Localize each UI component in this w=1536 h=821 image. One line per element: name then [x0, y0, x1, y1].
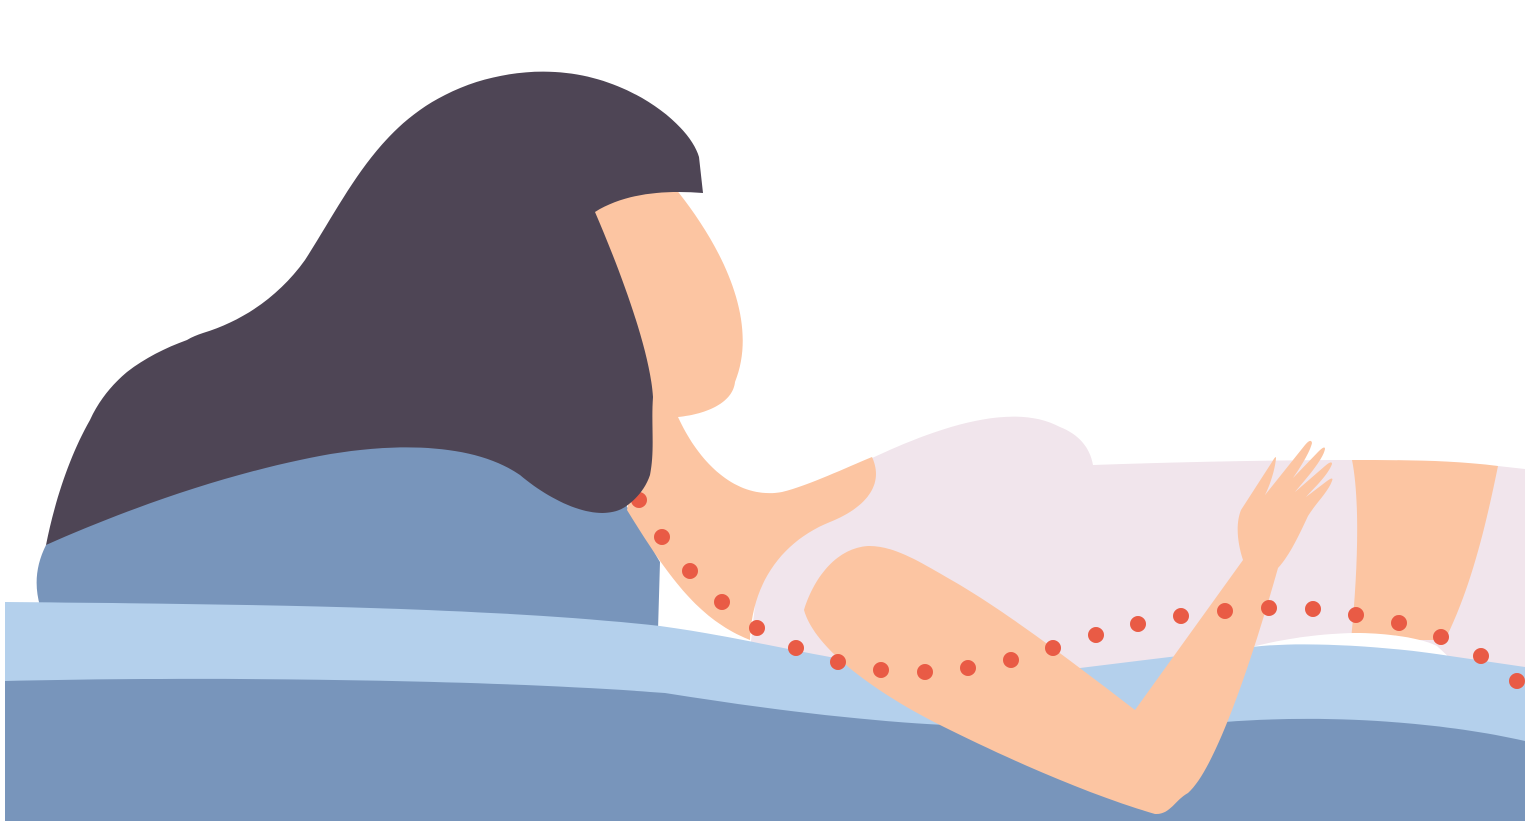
- arm and hand: [804, 441, 1332, 814]
- skin: face: [590, 184, 743, 440]
- hair: [46, 72, 703, 545]
- pillow: [37, 430, 660, 630]
- skin: belly: [1351, 460, 1498, 640]
- white gap at belly: [1252, 633, 1452, 660]
- first dot behind hair: [631, 492, 647, 508]
- dotted pain line: [654, 529, 1525, 689]
- blanket: dark layer: [5, 679, 1525, 821]
- skin: neck and chest: [627, 400, 876, 640]
- blanket: light layer: [5, 602, 1525, 760]
- shirt: torso: [750, 417, 1525, 680]
